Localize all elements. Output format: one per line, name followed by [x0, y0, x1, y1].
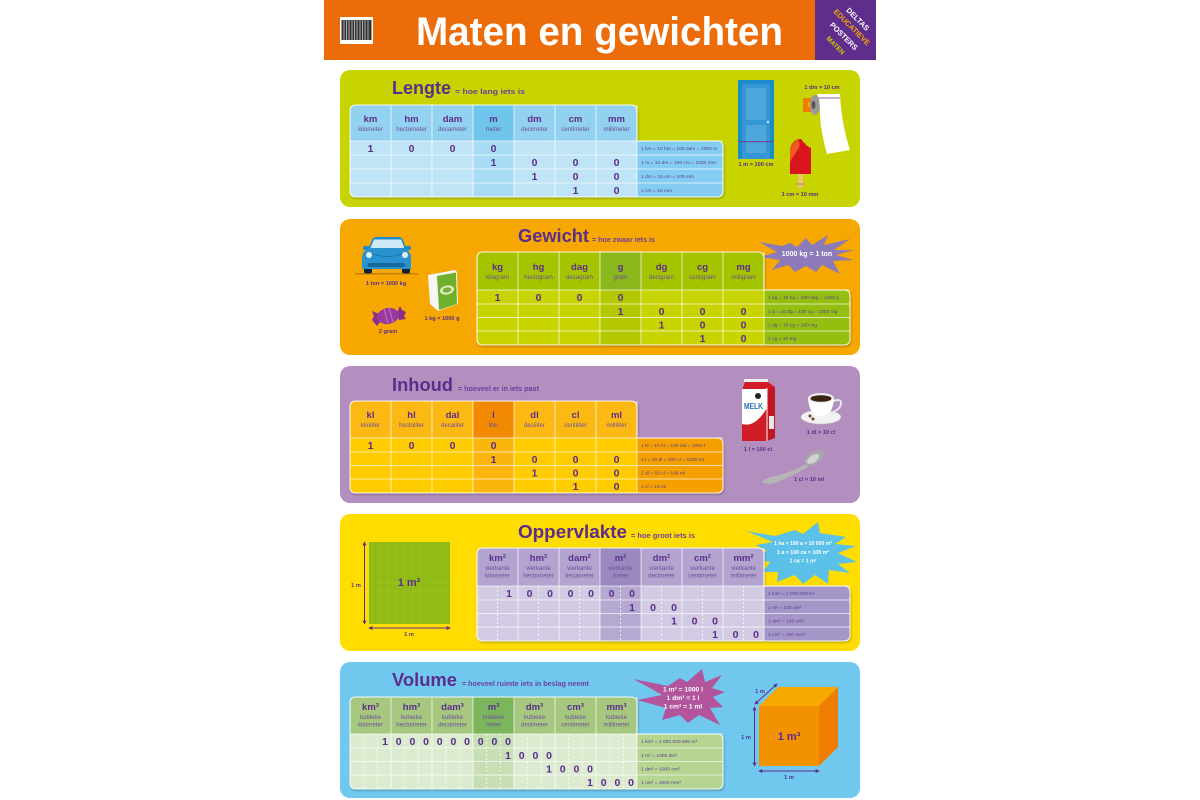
- table: Inhoud: decaliter: [441, 422, 464, 429]
- label: coffee cup: 1 dl = 10 cl: [807, 430, 836, 436]
- table: Gewicht: kilogram: [486, 274, 509, 281]
- panel: Inhoud: [340, 366, 860, 503]
- table: Gewicht: 1 dg = 10 cg = 100 mg: [768, 322, 817, 328]
- table: Gewicht: 1000: [495, 292, 624, 304]
- table: Lengte: [350, 105, 723, 197]
- table: Gewicht: decigram: [649, 274, 674, 281]
- diagram: cubic metre: 1 m³: [778, 731, 801, 743]
- table: Oppervlakte: 1 m² = 100 dm²: [768, 605, 802, 611]
- label: spoon: 1 cl = 10 ml: [794, 477, 824, 483]
- table: Lengte: kilometer: [358, 126, 383, 133]
- table: Oppervlakte: vierkante: [526, 565, 551, 572]
- table: Volume: [350, 697, 723, 789]
- icon: coffee cup: [801, 393, 841, 424]
- table: Volume: hectometer: [396, 722, 427, 728]
- table: Oppervlakte: millimeter: [730, 572, 757, 580]
- table: Volume: dm³: [526, 702, 543, 713]
- table: Inhoud: 1 cl = 10 ml: [641, 484, 666, 490]
- table: Inhoud: 1 kl = 10 hl = 100 dal = 1000 l: [641, 443, 705, 449]
- subheading: Inhoud: = hoeveel er in iets past: [458, 386, 540, 393]
- table: Gewicht: dag: [571, 262, 588, 273]
- table: Oppervlakte: vierkante: [567, 565, 592, 572]
- table: Oppervlakte: [477, 548, 850, 641]
- table: Oppervlakte: 100: [671, 616, 718, 628]
- table: Gewicht: 1 g = 10 dg = 100 cg = 1000 mg: [768, 309, 838, 315]
- table: Lengte: millimeter: [603, 126, 630, 133]
- diagram: cubic metre: 1 m: [741, 735, 751, 741]
- publisher badge: EDUCATIEVE: [832, 7, 872, 47]
- table: Oppervlakte: 1 dm² = 100 cm²: [768, 618, 804, 624]
- table: Gewicht: milligram: [731, 274, 756, 281]
- table: Lengte: 1 m = 10 dm = 100 cm = 1000 mm: [641, 160, 716, 166]
- callout: volume to litres: [633, 669, 725, 725]
- table: Gewicht: g: [618, 262, 624, 273]
- table: Oppervlakte: hectometer: [523, 572, 554, 580]
- heading: Volume: Volume: [392, 670, 457, 690]
- table: Inhoud: [350, 401, 723, 493]
- icon: toilet roll: [803, 94, 850, 154]
- publisher badge: POSTERS: [828, 20, 860, 52]
- icon: popsicle: [790, 139, 811, 188]
- table: Oppervlakte: vierkante: [649, 565, 674, 572]
- table: Oppervlakte: 100: [712, 629, 759, 641]
- table: Inhoud: milliliter: [606, 422, 627, 429]
- table: Inhoud: dal: [446, 410, 459, 421]
- table: Oppervlakte: kilometer: [485, 572, 510, 580]
- title: Maten en gewichten: [416, 10, 783, 54]
- heading: Lengte: Lengte: [392, 78, 451, 98]
- table: Oppervlakte: centimeter: [688, 572, 717, 580]
- label: door: 1 m = 100 cm: [738, 162, 774, 168]
- label: candy: 2 gram: [379, 329, 397, 335]
- table: Gewicht: cg: [697, 262, 708, 273]
- table: Oppervlakte: cm²: [694, 553, 711, 564]
- table: Lengte: decimeter: [521, 126, 548, 133]
- table: Inhoud: 1000: [491, 454, 620, 466]
- label: car: 1 ton = 1000 kg: [366, 281, 407, 287]
- table: Lengte: 1000: [368, 143, 497, 155]
- label: sugar bag: 1 kg = 1000 g: [425, 316, 460, 322]
- table: Oppervlakte: dam²: [568, 553, 591, 564]
- table: Oppervlakte: 1 cm² = 100 mm²: [768, 632, 805, 638]
- table: Volume: hm³: [403, 702, 420, 713]
- table: Inhoud: liter: [489, 422, 498, 429]
- table: Gewicht: mg: [736, 262, 751, 273]
- icon: candy: [372, 306, 406, 326]
- table: Oppervlakte: 1000000: [506, 588, 635, 600]
- icon: milk carton: MELK: [744, 401, 764, 411]
- icon: spoon: [762, 447, 826, 484]
- table: Lengte: m: [489, 114, 498, 125]
- subheading: Gewicht: = hoe zwaar iets is: [592, 237, 655, 244]
- table: Gewicht: decagram: [566, 274, 593, 281]
- publisher badge: [815, 0, 876, 60]
- table: Lengte: centimeter: [561, 126, 590, 133]
- table: Volume: 1000: [587, 777, 634, 789]
- table: Volume: kubieke: [360, 714, 382, 721]
- table: Lengte: 100: [532, 171, 620, 183]
- label: toilet roll: 1 dm = 10 cm: [804, 85, 840, 91]
- table: Volume: decameter: [438, 722, 467, 728]
- table: Oppervlakte: m²: [615, 553, 626, 564]
- diagram: square metre: [351, 542, 450, 638]
- publisher badge: DELTAS: [844, 6, 871, 33]
- table: Lengte: cm: [569, 114, 582, 125]
- table: Volume: 1 dm³ = 1000 cm³: [641, 766, 680, 772]
- icon: car: [355, 237, 418, 274]
- table: Inhoud: 1 l = 10 dl = 100 cl = 1000 ml: [641, 457, 704, 463]
- table: Volume: 1 m³ = 1000 dm³: [641, 753, 677, 759]
- table: Inhoud: 10: [573, 481, 620, 493]
- table: Volume: kubieke: [483, 714, 505, 721]
- label: milk carton: 1 l = 100 cl: [744, 447, 773, 453]
- table: Volume: centimeter: [561, 722, 590, 728]
- table: Volume: meter: [486, 722, 501, 728]
- table: Oppervlakte: km²: [489, 553, 506, 564]
- table: Inhoud: ml: [611, 410, 622, 421]
- heading: Gewicht: Gewicht: [518, 226, 589, 246]
- table: Volume: mm³: [606, 702, 627, 713]
- table: Oppervlakte: 1 km² = 1 000 000 m²: [768, 591, 815, 597]
- table: Gewicht: hg: [533, 262, 544, 273]
- table: Lengte: meter: [486, 126, 501, 133]
- table: Gewicht: [477, 252, 850, 345]
- table: Volume: 1 cm³ = 1000 mm³: [641, 780, 681, 786]
- table: Volume: kubieke: [565, 714, 587, 721]
- table: Gewicht: 10: [700, 333, 747, 345]
- table: Oppervlakte: mm²: [733, 553, 754, 564]
- table: Inhoud: 1 dl = 10 cl = 100 ml: [641, 470, 685, 476]
- table: Inhoud: dl: [530, 410, 539, 421]
- table: Volume: 1000: [505, 750, 552, 762]
- table: Lengte: dam: [443, 114, 462, 125]
- diagram: square metre: 1 m: [404, 632, 414, 638]
- table: Oppervlakte: vierkante: [690, 565, 715, 572]
- diagram: cubic metre: [741, 684, 838, 781]
- publisher badge: MATEN: [825, 35, 846, 57]
- table: Volume: kubieke: [606, 714, 628, 721]
- table: Volume: 1 km³ = 1 000 000 000 m³: [641, 739, 698, 745]
- diagram: square metre: 1 m²: [398, 577, 421, 589]
- panel: Lengte: [340, 70, 860, 207]
- subheading: Volume: = hoeveel ruimte iets in beslag neemt: [462, 681, 590, 688]
- table: Inhoud: kiloliter: [361, 422, 380, 429]
- heading: Inhoud: Inhoud: [392, 375, 453, 395]
- table: Oppervlakte: vierkante: [608, 565, 633, 572]
- barcode: [340, 17, 373, 44]
- table: Lengte: decameter: [438, 126, 467, 133]
- table: Lengte: hectometer: [396, 126, 427, 133]
- callout: hectare conversions: 1 ca = 1 m²: [790, 558, 817, 564]
- table: Lengte: 1000: [491, 157, 620, 169]
- header banner: [324, 0, 876, 60]
- table: Gewicht: 100: [659, 320, 747, 332]
- table: Lengte: 1 km = 10 hm = 100 dam = 1000 m: [641, 146, 717, 152]
- table: Lengte: 1 cm = 10 mm: [641, 188, 672, 194]
- table: Lengte: mm: [608, 114, 625, 125]
- table: Oppervlakte: hm²: [530, 553, 547, 564]
- table: Gewicht: centigram: [689, 274, 716, 281]
- table: Inhoud: l: [492, 410, 495, 421]
- table: Volume: m³: [488, 702, 499, 713]
- table: Volume: 1000000000: [382, 736, 511, 748]
- table: Oppervlakte: decameter: [565, 572, 594, 580]
- callout: hectare conversions: 1 ha = 100 a = 10 000 m²: [774, 541, 832, 547]
- table: Gewicht: kg: [492, 262, 503, 273]
- table: Volume: km³: [362, 702, 379, 713]
- table: Gewicht: gram: [614, 274, 627, 281]
- callout: volume to litres: 1 dm³ = 1 l: [667, 695, 700, 702]
- table: Volume: decimeter: [521, 722, 548, 728]
- panel: Gewicht: [340, 219, 860, 355]
- callout: hectare conversions: 1 a = 100 ca = 100 m²: [777, 550, 829, 556]
- table: Gewicht: hectogram: [524, 274, 553, 281]
- table: Oppervlakte: meter: [613, 572, 628, 580]
- table: Volume: dam³: [441, 702, 464, 713]
- table: Volume: 1000: [546, 764, 593, 776]
- table: Inhoud: 1000: [368, 440, 497, 452]
- table: Inhoud: hl: [407, 410, 416, 421]
- diagram: square metre: 1 m: [351, 583, 361, 589]
- table: Inhoud: centiliter: [564, 422, 587, 429]
- table: Inhoud: deciliter: [524, 422, 545, 429]
- table: Oppervlakte: vierkante: [485, 565, 510, 572]
- table: Oppervlakte: dm²: [653, 553, 670, 564]
- icon: sugar bag: [428, 270, 458, 311]
- subheading: Lengte: = hoe lang iets is: [455, 89, 525, 96]
- panel: Oppervlakte: [340, 514, 860, 651]
- callout: 1000 kg = 1 ton: 1000 kg = 1 ton: [782, 251, 832, 258]
- heading: Oppervlakte: Oppervlakte: [518, 522, 627, 542]
- table: Gewicht: 1 cg = 10 mg: [768, 336, 797, 342]
- table: Lengte: hm: [404, 114, 419, 125]
- table: Volume: cm³: [567, 702, 584, 713]
- table: Oppervlakte: vierkante: [731, 565, 756, 572]
- callout: hectare conversions: [746, 522, 857, 584]
- table: Volume: millimeter: [603, 722, 630, 728]
- table: Volume: kubieke: [401, 714, 423, 721]
- diagram: cubic metre: 1 m: [784, 775, 794, 781]
- icon: door: [738, 80, 774, 159]
- table: Lengte: km: [364, 114, 377, 125]
- table: Inhoud: hectoliter: [399, 422, 424, 429]
- callout: 1000 kg = 1 ton: [759, 235, 854, 274]
- table: Lengte: dm: [527, 114, 542, 125]
- table: Inhoud: 100: [532, 468, 620, 480]
- table: Gewicht: 1 kg = 10 hg = 100 dag = 1000 g: [768, 295, 839, 301]
- table: Volume: kubieke: [442, 714, 464, 721]
- panel: Volume: [340, 662, 860, 798]
- table: Volume: kilometer: [358, 722, 383, 728]
- table: Inhoud: kl: [367, 410, 374, 421]
- table: Oppervlakte: 100: [629, 602, 677, 614]
- label: popsicle: 1 cm = 10 mm: [782, 192, 818, 198]
- table: Gewicht: dg: [656, 262, 667, 273]
- icon: milk carton: [742, 379, 775, 441]
- table: Lengte: 10: [573, 185, 620, 197]
- diagram: cubic metre: 1 m: [755, 689, 765, 695]
- callout: volume to litres: 1 cm³ = 1 ml: [664, 704, 702, 710]
- table: Oppervlakte: decimeter: [648, 572, 675, 580]
- callout: volume to litres: 1 m³ = 1000 l: [663, 686, 703, 694]
- subheading: Oppervlakte: = hoe groot iets is: [631, 533, 695, 540]
- table: Gewicht: 1000: [618, 306, 747, 318]
- table: Inhoud: cl: [572, 410, 579, 421]
- table: Lengte: 1 dm = 10 cm = 100 mm: [641, 174, 694, 180]
- table: Volume: kubieke: [524, 714, 546, 721]
